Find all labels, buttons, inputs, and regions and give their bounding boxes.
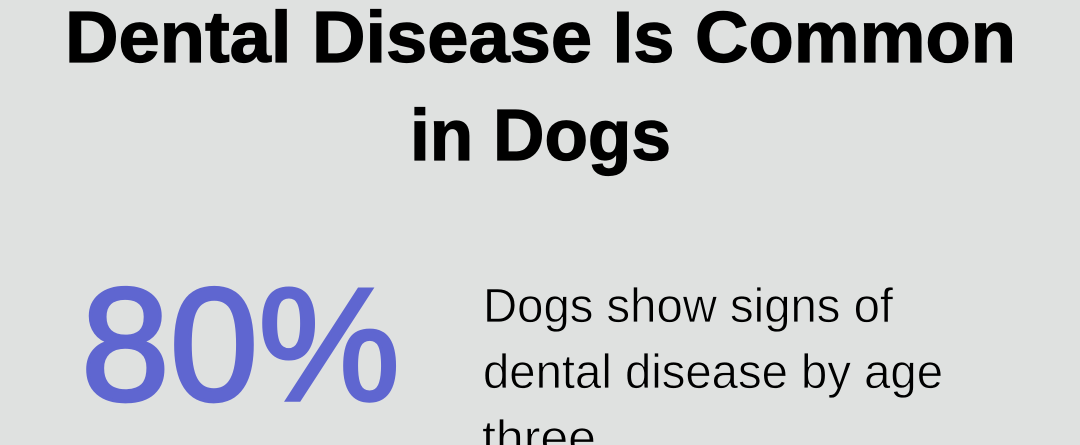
statistic description: dental disease by age — [483, 346, 943, 399]
title: Dental Disease Is Common — [65, 0, 1016, 78]
statistic description — [482, 280, 943, 445]
title — [65, 0, 1016, 176]
statistic description: Dogs show signs of — [483, 280, 894, 333]
statistic: 80%: 80% — [81, 255, 400, 435]
title: in Dogs — [410, 96, 671, 176]
